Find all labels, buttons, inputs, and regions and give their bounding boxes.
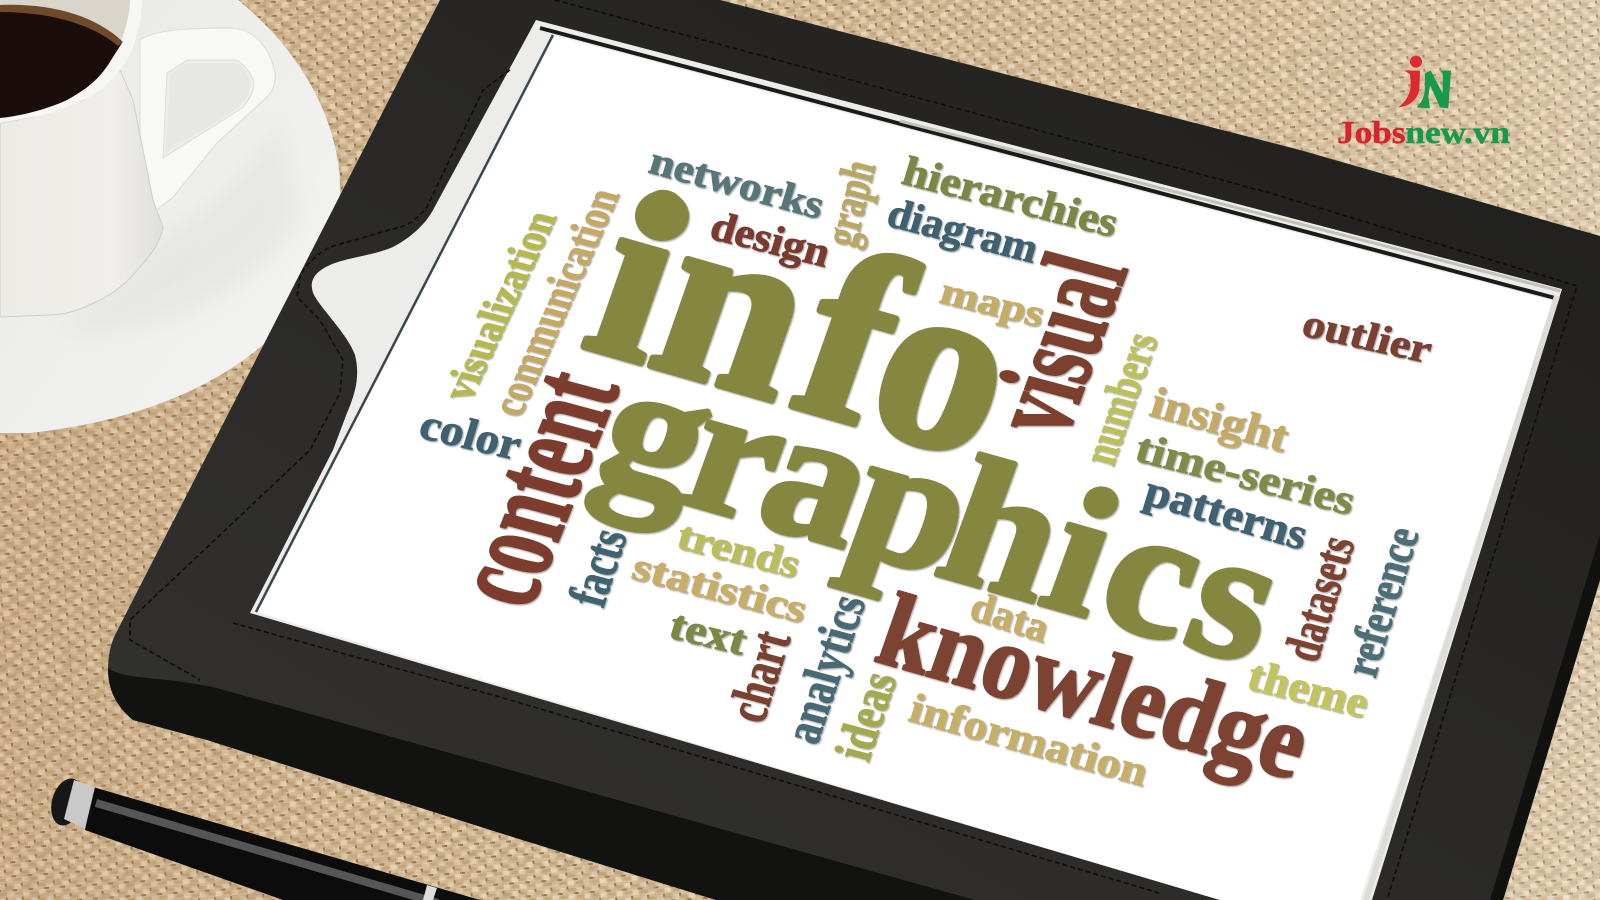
word: graphics: graphics (576, 322, 1307, 702)
word: visual: visual (962, 240, 1153, 447)
word: color: color (414, 400, 527, 470)
screen (256, 35, 1553, 900)
word: content: content (420, 357, 647, 618)
word: networks: networks (644, 138, 829, 228)
word: numbers: numbers (1072, 327, 1169, 470)
icon: cup handle (140, 28, 275, 213)
word: theme: theme (1242, 651, 1375, 727)
icon: coffee (0, 7, 122, 118)
word: insight: insight (1145, 378, 1295, 462)
word: info, enlarged i dot (635, 191, 689, 241)
word: patterns: patterns (1139, 466, 1313, 560)
pen barrel (85, 787, 480, 900)
logo mark: JN (1398, 56, 1451, 108)
case side band right (1490, 535, 1600, 900)
silver right strip (1366, 296, 1557, 900)
saucer (0, 0, 340, 433)
word: graph: graph (814, 154, 886, 252)
word: reference: reference (1334, 522, 1430, 682)
word: time-series: time-series (1130, 426, 1360, 525)
silver top strip (900, 121, 1560, 291)
word: ideas: ideas (825, 666, 909, 766)
word: maps: maps (935, 270, 1050, 336)
stylus pen (46, 775, 480, 900)
word: design: design (705, 204, 835, 277)
logo wordmark: Jobsnew.vn (1337, 114, 1510, 150)
word: hierarchies: hierarchies (897, 149, 1123, 247)
word: facts: facts (557, 522, 639, 612)
icon: cup body (0, 70, 163, 317)
word: knowledge: knowledge (864, 571, 1324, 801)
logo: Jobsnew.vn (1337, 56, 1510, 150)
pen highlight (96, 803, 438, 900)
coffee cup (0, 0, 275, 317)
word: outlier: outlier (1297, 301, 1437, 372)
word: datasets: datasets (1274, 530, 1367, 667)
word: info: info (561, 139, 1050, 509)
word: statistics: statistics (627, 544, 812, 632)
case side band bottom (108, 668, 975, 900)
word: diagram: diagram (882, 191, 1044, 273)
word: text: text (664, 603, 752, 665)
screen dark edge top (540, 28, 1555, 298)
icon: cup inner wall (0, 0, 130, 116)
word: visualization: visualization (432, 206, 566, 405)
word: information: information (904, 686, 1153, 796)
pen tip (46, 775, 88, 829)
pen ring (64, 780, 95, 829)
word: data: data (965, 584, 1054, 652)
word: trends: trends (672, 513, 805, 587)
word cloud (414, 138, 1437, 801)
screen dark edge left (256, 35, 553, 612)
word: chart: chart (716, 624, 804, 728)
icon: cup rim (0, 0, 142, 123)
icon: handle opening shadow (166, 63, 251, 152)
word: analytics: analytics (774, 589, 878, 749)
word: communication: communication (480, 183, 629, 421)
